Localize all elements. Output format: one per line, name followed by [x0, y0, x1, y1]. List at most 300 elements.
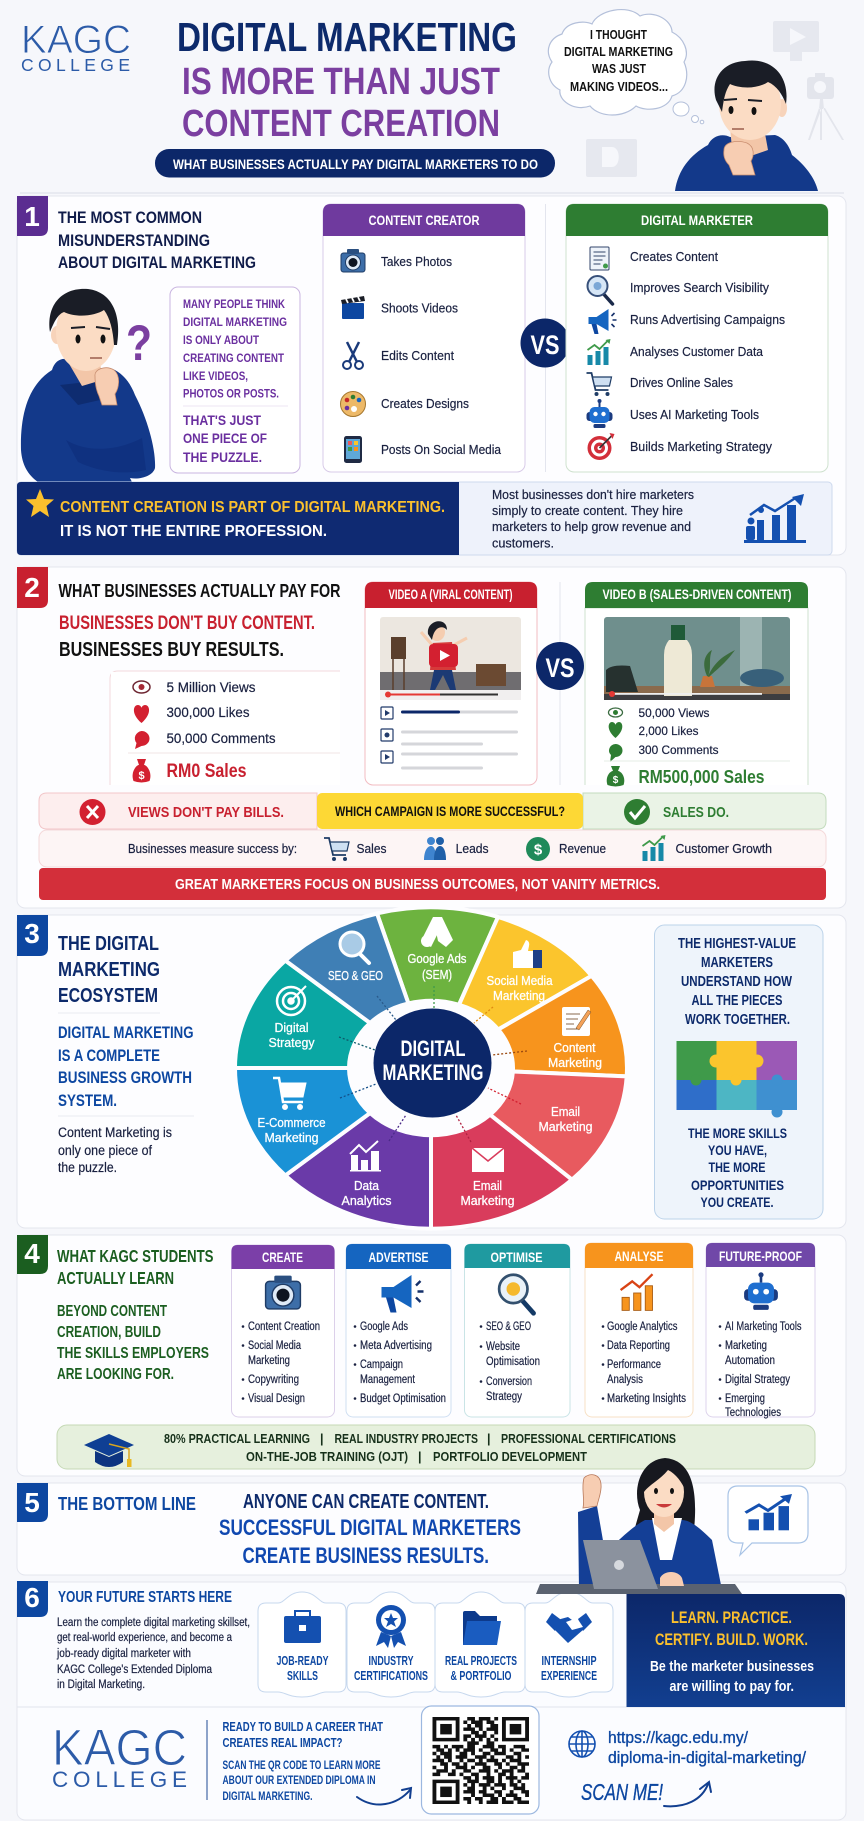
panel 1: misunderstanding: [17, 196, 846, 555]
footer: [52, 1706, 806, 1814]
VS badge: [536, 642, 584, 690]
card: optimise: [464, 1244, 570, 1417]
icon: robot: [744, 1272, 778, 1310]
segment: E-Commerce: [235, 1068, 370, 1176]
wheel labels: Email: [473, 1178, 502, 1193]
content creator tasks: Posts On Social Media: [381, 442, 502, 457]
section 3 text: IS A COMPLETE: [58, 1047, 160, 1065]
subtitle pill: [155, 149, 555, 178]
video A card: VIDEO A (VIRAL CONTENT): [388, 587, 512, 602]
arrow: scan me: [664, 1782, 711, 1806]
future-proof skills: Digital Strategy: [725, 1374, 790, 1386]
banner explanation: marketers to help grow revenue and: [492, 520, 691, 534]
question mark: ?: [126, 315, 152, 371]
create skills: [242, 1321, 320, 1405]
segment: Digital Strategy: [235, 960, 370, 1068]
benefit: job-ready skills: SKILLS: [287, 1669, 318, 1683]
icon: growth chart: [642, 835, 666, 861]
wheel labels: Marketing: [460, 1193, 514, 1208]
icon: strategy target: [277, 986, 306, 1015]
slogan box: are willing to pay for.: [670, 1678, 794, 1695]
future-proof skills: Technologies: [725, 1407, 781, 1419]
icon: green comment: [609, 744, 622, 762]
video A thumbnail: [380, 617, 521, 700]
future-proof skills: [719, 1321, 802, 1419]
icon: green money bag: [607, 766, 624, 786]
thought bubble: WAS JUST: [592, 62, 646, 76]
icon: data chart: [588, 339, 610, 365]
wheel labels: (SEM): [422, 967, 452, 982]
website address: https://kagc.edu.my/: [608, 1728, 748, 1747]
feature text: [164, 1432, 676, 1464]
viral stats text: [166, 680, 276, 782]
optimise skills: SEO & GEO: [486, 1321, 531, 1333]
section 2 heading: [58, 581, 340, 661]
section 4 text: ARE LOOKING FOR.: [57, 1366, 174, 1383]
wheel labels: Social Media: [486, 973, 553, 988]
section 5 label: THE BOTTOM LINE: [58, 1494, 196, 1514]
panel 5: bottom line: [17, 1483, 846, 1575]
highest value callout: [654, 925, 823, 1219]
section badge 3: [17, 915, 48, 956]
highest value callout: MARKETERS: [701, 955, 773, 971]
icon: dollar coin: $: [534, 842, 543, 858]
digital marketer card: DIGITAL MARKETER: [641, 212, 753, 228]
analyse skills: Performance: [607, 1359, 661, 1371]
thought bubble: I THOUGHT: [590, 28, 647, 42]
banner explanation: [492, 488, 694, 550]
thought bubble: DIGITAL MARKETING: [564, 45, 673, 59]
wheel labels: E-Commerce: [258, 1115, 326, 1130]
wheel hub: MARKETING: [382, 1060, 484, 1085]
misconception callout: IS ONLY ABOUT: [183, 333, 260, 347]
sales stats text: 300 Comments: [638, 743, 718, 757]
icon: target: [588, 433, 614, 460]
analyse skills: Analysis: [607, 1374, 643, 1386]
website address: [608, 1728, 806, 1767]
section 3 text: DIGITAL MARKETING: [58, 1024, 194, 1042]
content creator tasks: Takes Photos: [381, 254, 452, 269]
icon: eye: [133, 681, 150, 693]
feature text: |: [320, 1432, 324, 1446]
digital marketer card: [566, 204, 828, 472]
segment: Email Marketing dark: [431, 1115, 572, 1229]
wheel hub: DIGITAL: [400, 1036, 466, 1061]
icon: shopping cart: [273, 1078, 306, 1110]
content creator tasks: Shoots Videos: [381, 300, 458, 316]
scan me: SCAN ME!: [581, 1779, 663, 1805]
icon: thumbs up: [513, 940, 542, 968]
takeaway banner: [39, 868, 826, 900]
icon: comment bubble: [135, 731, 150, 749]
section badge 6: [17, 1581, 48, 1617]
content creator tasks: Creates Designs: [381, 396, 469, 411]
header: [20, 10, 844, 193]
section 3 text: BUSINESS GROWTH: [58, 1069, 192, 1087]
section 1 heading: THE MOST COMMON: [58, 208, 202, 227]
content creator tasks: [381, 254, 502, 457]
slogan box: LEARN. PRACTICE.: [671, 1608, 792, 1627]
optimise skills: Strategy: [486, 1391, 522, 1403]
segment: Social Media: [459, 917, 592, 1030]
misconception callout: LIKE VIDEOS,: [183, 369, 248, 383]
success measures row: Sales: [356, 842, 386, 856]
wheel labels: Content: [554, 1040, 596, 1055]
slogan box: CERTIFY. BUILD. WORK.: [655, 1630, 808, 1649]
advertise skills: Meta Advertising: [360, 1340, 432, 1352]
website address: diploma-in-digital-marketing/: [608, 1748, 806, 1767]
banner explanation: customers.: [492, 536, 554, 550]
analyse skills: [602, 1321, 686, 1405]
feature text: PROFESSIONAL CERTIFICATIONS: [501, 1432, 676, 1446]
card: analyse: ANALYSE: [614, 1248, 664, 1264]
section 4 text: BEYOND CONTENT: [57, 1303, 167, 1320]
section 6 intro: in Digital Marketing.: [57, 1679, 145, 1691]
panel 3: ecosystem: [17, 907, 846, 1229]
section 4 text: WHAT KAGC STUDENTS: [57, 1246, 214, 1266]
verdict strip: VIEWS DON'T PAY BILLS.: [128, 804, 284, 821]
section 1 heading: MISUNDERSTANDING: [58, 231, 210, 250]
content creator card: [323, 204, 525, 472]
feature text: 80% PRACTICAL LEARNING: [164, 1432, 310, 1446]
wheel labels: Google Ads: [408, 951, 467, 966]
icon: award ribbon: [376, 1605, 406, 1648]
subtitle pill: WHAT BUSINESSES ACTUALLY PAY DIGITAL MARKETERS TO DO: [173, 156, 538, 172]
viral stats text: 300,000 Likes: [166, 705, 250, 720]
icon: palette: [340, 392, 366, 416]
question box: WHICH CAMPAIGN IS MORE SUCCESSFUL?: [335, 804, 565, 819]
confused man illustration: [21, 289, 155, 482]
benefit: internship: EXPERIENCE: [541, 1669, 597, 1683]
create skills: Social Media: [248, 1340, 301, 1352]
card: analyse: [585, 1243, 693, 1417]
advertise skills: [354, 1321, 446, 1405]
icon: graduation cap: [84, 1434, 134, 1467]
wheel labels: Digital: [274, 1020, 309, 1035]
logo: COLLEGE: [21, 55, 130, 75]
VS badge: VS: [530, 330, 560, 360]
highest value callout: THE HIGHEST-VALUE: [678, 936, 796, 952]
wheel labels: Marketing: [493, 988, 545, 1003]
background icon: video monitor: [773, 21, 819, 61]
advertise skills: Budget Optimisation: [360, 1393, 446, 1405]
highest value callout: ALL THE PIECES: [692, 993, 783, 1009]
wheel labels: Marketing: [548, 1055, 602, 1070]
advertise skills: Google Ads: [360, 1321, 408, 1333]
section badge 4: 4: [24, 1238, 40, 1269]
segment: Email Marketing light: [490, 1072, 627, 1180]
icon: cross: [80, 799, 106, 825]
banner explanation: Most businesses don't hire marketers: [492, 488, 694, 502]
section 6 intro: KAGC College's Extended Diploma: [57, 1664, 213, 1676]
title: DIGITAL MARKETING: [177, 14, 517, 60]
slogan box: [626, 1594, 845, 1707]
future-proof skills: AI Marketing Tools: [725, 1321, 802, 1333]
content creator card: CONTENT CREATOR: [368, 212, 480, 228]
wheel connectors: [339, 986, 527, 1142]
misconception callout: THAT'S JUST: [183, 412, 261, 428]
businesswoman illustration: [536, 1458, 742, 1594]
section 4 text: ACTUALLY LEARN: [57, 1268, 174, 1288]
takeaway banner: GREAT MARKETERS FOCUS ON BUSINESS OUTCOMES, NOT VANITY METRICS.: [175, 877, 660, 893]
icon: money bag: $: [138, 770, 145, 782]
highest value callout: WORK TOGETHER.: [685, 1012, 790, 1028]
advertise skills: Management: [360, 1374, 416, 1386]
panel 2: what businesses pay for: [17, 567, 846, 908]
misconception callout: CREATING CONTENT: [183, 351, 285, 365]
question box: [317, 793, 583, 829]
future-proof skills: Emerging: [725, 1393, 765, 1405]
logo: KAGC: [21, 18, 131, 62]
viral stats text: 50,000 Comments: [166, 731, 276, 746]
icon: green money bag: $: [613, 775, 619, 786]
icon: envelope: [472, 1148, 504, 1172]
section 3 text: Content Marketing is: [58, 1125, 172, 1140]
icon: cart: [324, 838, 349, 861]
section 3 text: ECOSYSTEM: [58, 985, 158, 1007]
wheel labels: [258, 951, 602, 1208]
digital marketer tasks: Improves Search Visibility: [630, 280, 769, 295]
icon: cart: [586, 373, 612, 396]
section 6 intro: Learn the complete digital marketing skillset,: [57, 1617, 250, 1629]
icon: handshake: [546, 1613, 592, 1643]
panel 6: future starts here: [17, 1581, 846, 1820]
section 4 text: CREATION, BUILD: [57, 1324, 161, 1341]
icon: check: [624, 799, 650, 825]
success measures row: Leads: [456, 842, 489, 856]
section badge 1: 1: [24, 201, 40, 232]
misconception callout: DIGITAL MARKETING: [183, 315, 287, 329]
section 1 heading: ABOUT DIGITAL MARKETING: [58, 253, 256, 272]
thought bubble: [548, 10, 704, 124]
sales stats text: 50,000 Views: [638, 706, 710, 720]
icon: clapperboard: [341, 296, 365, 319]
viral stats box: [110, 671, 340, 785]
card: future-proof: [706, 1243, 815, 1419]
icon: dollar coin: [526, 837, 550, 861]
icon: folder: [463, 1611, 501, 1645]
card: advertise: ADVERTISE: [368, 1249, 428, 1265]
benefit: real projects: REAL PROJECTS: [445, 1654, 517, 1668]
wheel labels: Data: [354, 1178, 380, 1193]
analyse skills: Google Analytics: [607, 1321, 678, 1333]
icon: money bag: [133, 759, 150, 782]
wheel labels: Email: [551, 1104, 580, 1119]
icon: phone: [344, 436, 362, 463]
optimise skills: [480, 1321, 540, 1403]
card: create: [232, 1245, 334, 1417]
title: [177, 14, 517, 145]
VS badge: VS: [546, 653, 574, 683]
viral stats text: 5 Million Views: [166, 680, 256, 695]
optimise skills: Website: [486, 1341, 520, 1353]
background icon: camera on tripod: [807, 73, 844, 140]
icon: magnifier: [588, 276, 612, 304]
feature text: ON-THE-JOB TRAINING (OJT): [246, 1450, 408, 1464]
section 6 intro: get real-world experience, and become a: [57, 1632, 233, 1644]
icon: analytics chart: [350, 1141, 381, 1172]
optimise skills: Conversion: [486, 1376, 532, 1388]
wheel labels: Marketing: [264, 1130, 318, 1145]
title: IS MORE THAN JUST: [182, 61, 500, 103]
footer call to action: CREATES REAL IMPACT?: [222, 1735, 343, 1750]
wheel labels: Marketing: [538, 1119, 592, 1134]
video B thumbnail: [604, 617, 790, 700]
benefit: internship: [525, 1592, 613, 1697]
misconception callout: THE PUZZLE.: [183, 449, 262, 465]
section 3 text: [58, 933, 194, 1175]
digital marketer tasks: Runs Advertising Campaigns: [630, 312, 785, 327]
digital marketer tasks: Creates Content: [630, 249, 718, 264]
success measures row: Customer Growth: [676, 842, 772, 856]
feature text: REAL INDUSTRY PROJECTS: [334, 1432, 478, 1446]
segment: Google Ads: [377, 907, 498, 1005]
banner statement: CONTENT CREATION IS PART OF DIGITAL MARKETING.: [60, 499, 445, 516]
icon: magnifier gear: [499, 1275, 534, 1313]
wheel hub: [374, 1008, 492, 1118]
feature text: PORTFOLIO DEVELOPMENT: [433, 1450, 587, 1464]
thinking man illustration: [675, 60, 818, 191]
banner statement: [60, 499, 445, 540]
icon: megaphone: [382, 1275, 424, 1312]
highest value callout: THE MORE: [708, 1159, 766, 1175]
advertise skills: Campaign: [360, 1359, 403, 1371]
create skills: Marketing: [248, 1355, 290, 1367]
section 3 text: only one piece of: [58, 1143, 152, 1158]
card: optimise: OPTIMISE: [490, 1249, 542, 1265]
digital marketer tasks: Analyses Customer Data: [630, 344, 764, 359]
card: future-proof: FUTURE-PROOF: [719, 1248, 802, 1264]
section 6 intro: [56, 1589, 250, 1691]
wheel labels: Analytics: [342, 1193, 392, 1208]
success measures row: [39, 830, 826, 867]
video B card: VIDEO B (SALES-DRIVEN CONTENT): [602, 587, 792, 602]
content creator tasks: Edits Content: [381, 348, 454, 363]
bottom line statement: CREATE BUSINESS RESULTS.: [242, 1543, 489, 1568]
banner statement: IT IS NOT THE ENTIRE PROFESSION.: [60, 523, 327, 540]
footer call to action: DIGITAL MARKETING.: [222, 1791, 312, 1803]
analyse skills: Data Reporting: [607, 1340, 670, 1352]
verdict strip: SALES DO.: [663, 804, 729, 821]
wheel labels: SEO & GEO: [328, 968, 383, 983]
icon: robot: [586, 399, 612, 428]
highest value callout: THE MORE SKILLS: [688, 1125, 787, 1141]
misconception callout: ONE PIECE OF: [183, 430, 267, 446]
icon: globe: [569, 1731, 595, 1757]
section 6 intro: job-ready digital marketer with: [56, 1648, 191, 1660]
icon: SEO magnifier: [340, 932, 369, 963]
success measures row: Businesses measure success by:: [128, 842, 297, 856]
card: advertise: [346, 1244, 451, 1417]
section 4 text: THE SKILLS EMPLOYERS: [57, 1345, 209, 1362]
icon: clipboard: [562, 1007, 591, 1036]
benefit: real projects: & PORTFOLIO: [450, 1669, 512, 1683]
digital marketer tasks: Drives Online Sales: [630, 375, 733, 390]
section badge 3: 3: [24, 918, 40, 949]
digital marketer tasks: [630, 249, 785, 454]
footer call to action: [222, 1719, 383, 1803]
section 3 text: the puzzle.: [58, 1160, 117, 1175]
benefit: job-ready skills: [258, 1592, 346, 1697]
benefit: internship: INTERNSHIP: [542, 1654, 596, 1668]
section 1 heading: [58, 208, 256, 272]
digital marketer tasks: Builds Marketing Strategy: [630, 439, 772, 454]
optimise skills: Optimisation: [486, 1356, 540, 1368]
section 6 intro: YOUR FUTURE STARTS HERE: [58, 1589, 232, 1606]
icon: camera: [266, 1276, 300, 1309]
section badge 5: 5: [24, 1487, 40, 1518]
speech bubble with chart: [728, 1486, 808, 1555]
icon: people: [424, 837, 446, 860]
section 4 text: [57, 1246, 214, 1383]
icon: star: [26, 489, 54, 517]
footer call to action: READY TO BUILD A CAREER THAT: [222, 1719, 383, 1734]
feature text: |: [487, 1432, 490, 1446]
section 3 text: SYSTEM.: [58, 1092, 117, 1110]
bottom line statement: ANYONE CAN CREATE CONTENT.: [243, 1491, 489, 1513]
bottom line statement: [219, 1491, 521, 1568]
VS badge: [520, 318, 570, 368]
puzzle graphic: [676, 1041, 797, 1118]
segment: Data Analytics: [285, 1113, 431, 1229]
icon: heart: [134, 705, 149, 723]
icon: green eye: [608, 708, 622, 717]
create skills: Copywriting: [248, 1374, 299, 1386]
title: CONTENT CREATION: [182, 103, 500, 145]
highest value callout: YOU CREATE.: [700, 1194, 774, 1210]
card: create: CREATE: [262, 1249, 303, 1265]
ecosystem wheel: [235, 907, 627, 1229]
section 2 heading: WHAT BUSINESSES ACTUALLY PAY FOR: [58, 581, 340, 601]
footer call to action: SCAN THE QR CODE TO LEARN MORE: [222, 1760, 381, 1772]
bottom line statement: SUCCESSFUL DIGITAL MARKETERS: [219, 1515, 521, 1540]
create skills: Visual Design: [248, 1393, 305, 1405]
success measures row: Revenue: [559, 842, 606, 856]
footer call to action: ABOUT OUR EXTENDED DIPLOMA IN: [222, 1775, 376, 1787]
segment: Content Marketing: [498, 976, 627, 1076]
benefit: job-ready skills: JOB-READY: [276, 1654, 329, 1668]
sales stats text: RM500,000 Sales: [638, 767, 764, 787]
misconception callout: MANY PEOPLE THINK: [183, 297, 285, 311]
conclusion banner: [17, 482, 832, 555]
highest value callout: UNDERSTAND HOW: [681, 974, 792, 990]
section badge 1: [17, 196, 48, 236]
highest value callout: YOU HAVE,: [708, 1142, 767, 1158]
icon: camera: [341, 249, 365, 272]
create skills: Content Creation: [248, 1321, 320, 1333]
icon: orange chart: [621, 1274, 652, 1310]
misconception callout: PHOTOS OR POSTS.: [183, 386, 279, 400]
video A progress rows: [381, 707, 518, 770]
footer logo: COLLEGE: [52, 1767, 187, 1792]
misconception callout: [170, 287, 300, 473]
arrow to QR code: [357, 1788, 411, 1804]
section badge 2: [17, 567, 48, 608]
icon: megaphone: [588, 309, 616, 334]
video B card: [585, 582, 808, 787]
digital marketer tasks: Uses AI Marketing Tools: [630, 407, 759, 422]
sales stats text: 2,000 Likes: [638, 724, 698, 738]
benefit: industry certifications: [347, 1592, 435, 1697]
analyse skills: Marketing Insights: [607, 1393, 686, 1405]
QR code: [422, 1706, 539, 1814]
benefit: industry certifications: CERTIFICATIONS: [354, 1669, 428, 1683]
thought bubble: MAKING VIDEOS...: [570, 80, 668, 94]
background icon: tablet: [586, 139, 637, 177]
banner explanation: simply to create content. They hire: [492, 504, 683, 518]
icon: scissors: [343, 342, 363, 369]
features strip: [57, 1425, 815, 1469]
